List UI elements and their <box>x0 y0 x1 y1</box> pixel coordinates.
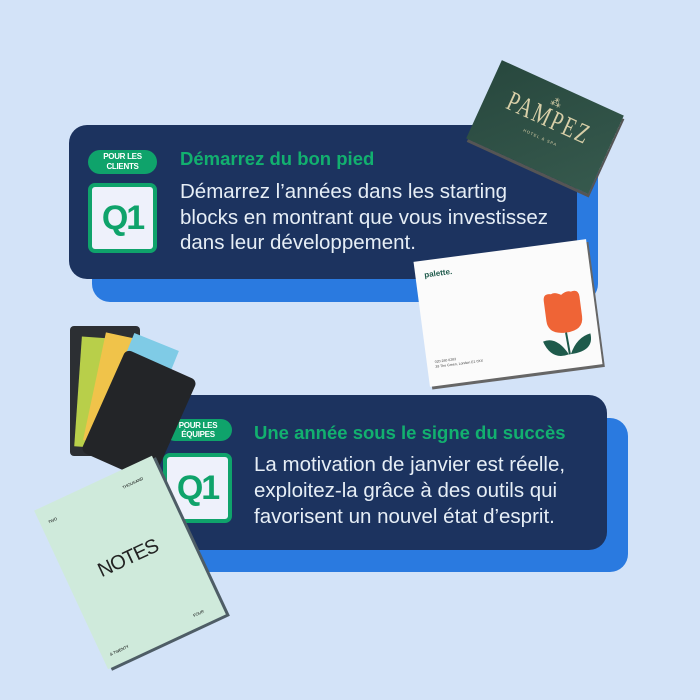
product: notes notebook: FOUR <box>192 609 205 618</box>
panel: clients shadow <box>92 145 598 302</box>
badge: pour les clients: CLIENTS <box>106 162 139 171</box>
text block: teams <box>254 453 565 528</box>
panel: teams <box>145 395 607 550</box>
product: palette notecard: palette. <box>424 267 453 280</box>
panel: clients <box>69 125 577 279</box>
icon: tulip <box>543 290 591 356</box>
product: pampez business card: HOTEL & SPA <box>522 128 558 147</box>
badge: pour les équipes <box>164 419 232 441</box>
product: pampez business card <box>466 60 624 194</box>
badge: pour les clients: POUR LES <box>103 152 142 161</box>
product: notes notebook <box>34 456 226 669</box>
product: notes notebook: & TWENTY <box>109 644 130 657</box>
text block: teams: La motivation de janvier est réelle, <box>254 453 565 476</box>
icon: Q1 box <box>163 453 232 523</box>
icon: Q1 box: Q1 <box>102 199 143 237</box>
product: palette notecard: 39 The Green, London E1 0XX <box>435 359 483 369</box>
product: notes notebook: NOTES <box>94 535 162 582</box>
text block: clients: blocks en montrant que vous investissez <box>180 206 548 228</box>
product: pampez business card: ⁂ <box>548 96 563 111</box>
heading: une année sous le signe du succès: Une année sous le signe du succès <box>254 422 566 443</box>
heading: démarrez du bon pied: Démarrez du bon pied <box>180 148 374 169</box>
panel: teams shadow <box>180 418 628 572</box>
text block: teams: favorisent un nouvel état d’esprit. <box>254 505 555 528</box>
product: palette notecard <box>414 239 602 387</box>
icon: Q1 box <box>88 183 157 253</box>
product: card holder with cards <box>70 326 196 470</box>
text block: teams: exploitez-la grâce à des outils qui <box>254 479 557 502</box>
badge: pour les équipes: ÉQUIPES <box>181 430 215 439</box>
text block: clients: Démarrez l’années dans les starting <box>180 180 507 203</box>
badge: pour les clients <box>88 150 157 174</box>
product: notes notebook: TWO <box>47 516 58 525</box>
product: notes notebook: THOUSAND <box>122 476 144 490</box>
product: palette notecard: 020 280 0283 <box>435 357 456 364</box>
text block: clients: dans leur développement. <box>180 231 416 254</box>
icon: Q1 box: Q1 <box>177 469 218 507</box>
text block: clients <box>180 180 548 254</box>
badge: pour les équipes: POUR LES <box>179 421 217 430</box>
product: pampez business card: PAMPEZ <box>502 86 596 151</box>
